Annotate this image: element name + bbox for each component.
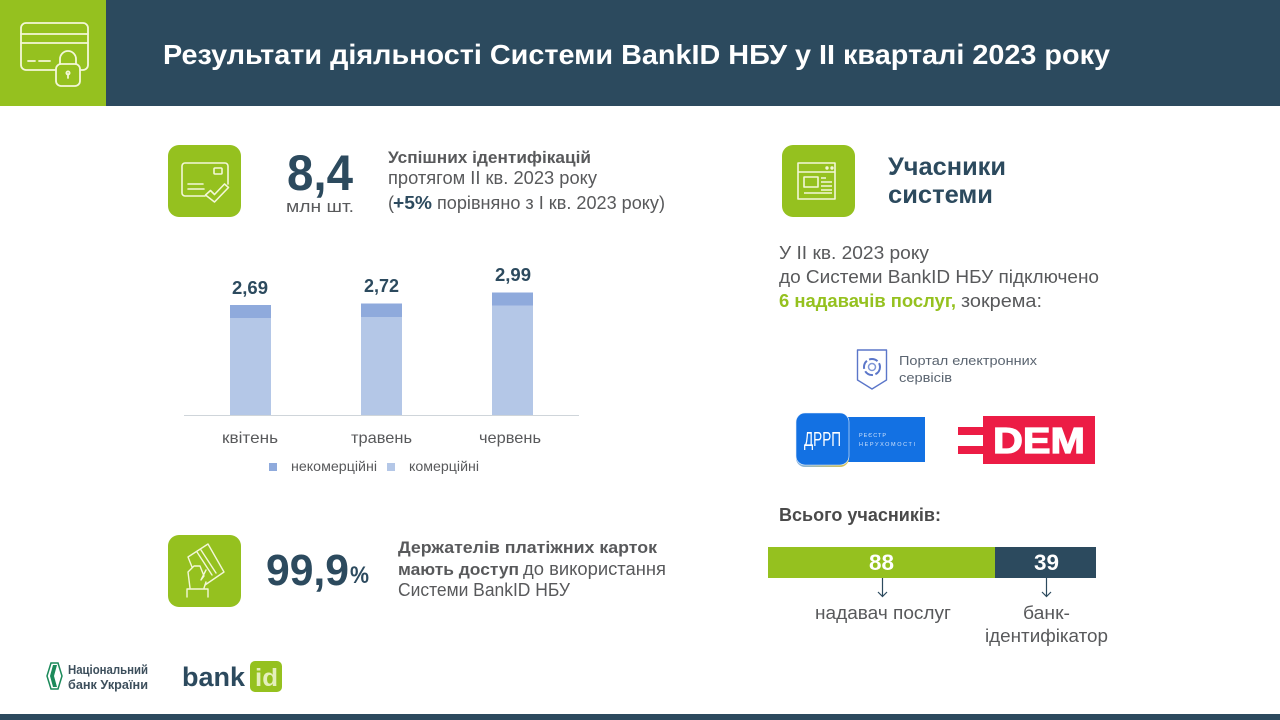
segment: service providers <box>768 547 995 623</box>
description text: Системи BankID НБУ <box>398 580 571 600</box>
text block: connected providers: до Системи BankID НБУ підключено <box>779 267 1099 287</box>
logo: electronic services portal: Портал електронних <box>899 353 1038 368</box>
logo: bank id: bank <box>182 662 246 692</box>
bar: June: червень <box>479 430 541 447</box>
heading: системи <box>888 181 993 209</box>
footer band <box>0 714 1280 720</box>
chart legend: некомерційні <box>291 459 377 474</box>
logo: electronic services portal <box>858 350 1038 389</box>
segment: identifying banks: ідентифікатор <box>985 626 1108 646</box>
heading <box>888 153 1006 209</box>
logo: National Bank of Ukraine: банк України <box>68 677 148 692</box>
panel: cardholders access <box>168 535 666 607</box>
text block: connected providers <box>779 243 1099 311</box>
text block: connected providers: У II кв. 2023 року <box>779 243 929 263</box>
logo: National Bank of Ukraine: Національний <box>68 662 148 677</box>
logo: bank id <box>182 661 282 692</box>
unit label: млн шт. <box>286 197 354 216</box>
big number 99,9%: 99,9 <box>266 546 349 595</box>
title: Результати діяльності Системи BankID НБУ у II кварталі 2023 року <box>163 39 1110 70</box>
logo: National Bank of Ukraine <box>47 662 148 692</box>
stacked bar: participants <box>768 547 1108 646</box>
bar: May <box>351 276 412 447</box>
bar: April: квітень <box>222 430 278 447</box>
big number 99,9%: % <box>350 562 369 589</box>
logo: real estate registry <box>796 413 925 467</box>
icon: browser window <box>782 145 855 217</box>
segment: service providers: 88 <box>869 550 894 575</box>
logo: electronic services portal: сервісів <box>899 370 952 385</box>
logo: real estate registry: НЕРУХОМОСТІ <box>859 442 915 448</box>
logo: DEM: DEM <box>993 420 1085 461</box>
text block: connected providers: зокрема: <box>961 291 1042 311</box>
bar: May: 2,72 <box>364 276 399 296</box>
bar chart: monthly identifications <box>184 265 579 474</box>
heading: Учасники <box>888 153 1006 181</box>
bar: May: травень <box>351 430 412 447</box>
description text: Успішних ідентифікацій <box>388 148 591 167</box>
segment: identifying banks: 39 <box>1034 550 1059 575</box>
description text <box>388 148 665 213</box>
chart legend: комерційні <box>409 459 479 474</box>
subheading: total participants: Всього учасників: <box>779 505 941 525</box>
description text: Держателів платіжних карток <box>398 538 658 557</box>
description text: до використання <box>523 559 666 579</box>
description text: мають доступ <box>398 560 519 579</box>
chart legend <box>269 459 479 474</box>
logo: DEM <box>958 416 1095 464</box>
logo: real estate registry: ДРРП <box>804 429 841 451</box>
bar: June <box>479 265 541 447</box>
logo: bank id: id <box>255 664 278 692</box>
description text: +5% <box>393 193 432 213</box>
header band <box>0 0 1280 106</box>
description text <box>398 538 666 600</box>
bar: April: 2,69 <box>232 278 268 298</box>
description text: протягом II кв. 2023 року <box>388 168 597 188</box>
bar: April <box>222 278 278 447</box>
icon: bank card with padlock <box>21 23 88 86</box>
panel: system participants heading <box>782 145 1006 217</box>
icon: card with check mark <box>168 145 241 217</box>
segment: service providers: надавач послуг <box>815 603 951 623</box>
logo: real estate registry: РЕЄСТР <box>859 433 886 439</box>
description text: ( <box>388 193 394 213</box>
text block: connected providers: 6 надавачів послуг, <box>779 291 956 311</box>
panel: successful identifications <box>168 145 665 217</box>
bar: June: 2,99 <box>495 265 531 285</box>
segment: identifying banks <box>985 547 1108 646</box>
icon: hand holding card <box>168 535 241 607</box>
big number 8,4: 8,4 <box>287 145 353 201</box>
segment: identifying banks: банк- <box>1023 603 1070 623</box>
description text: порівняно з I кв. 2023 року) <box>437 193 665 213</box>
